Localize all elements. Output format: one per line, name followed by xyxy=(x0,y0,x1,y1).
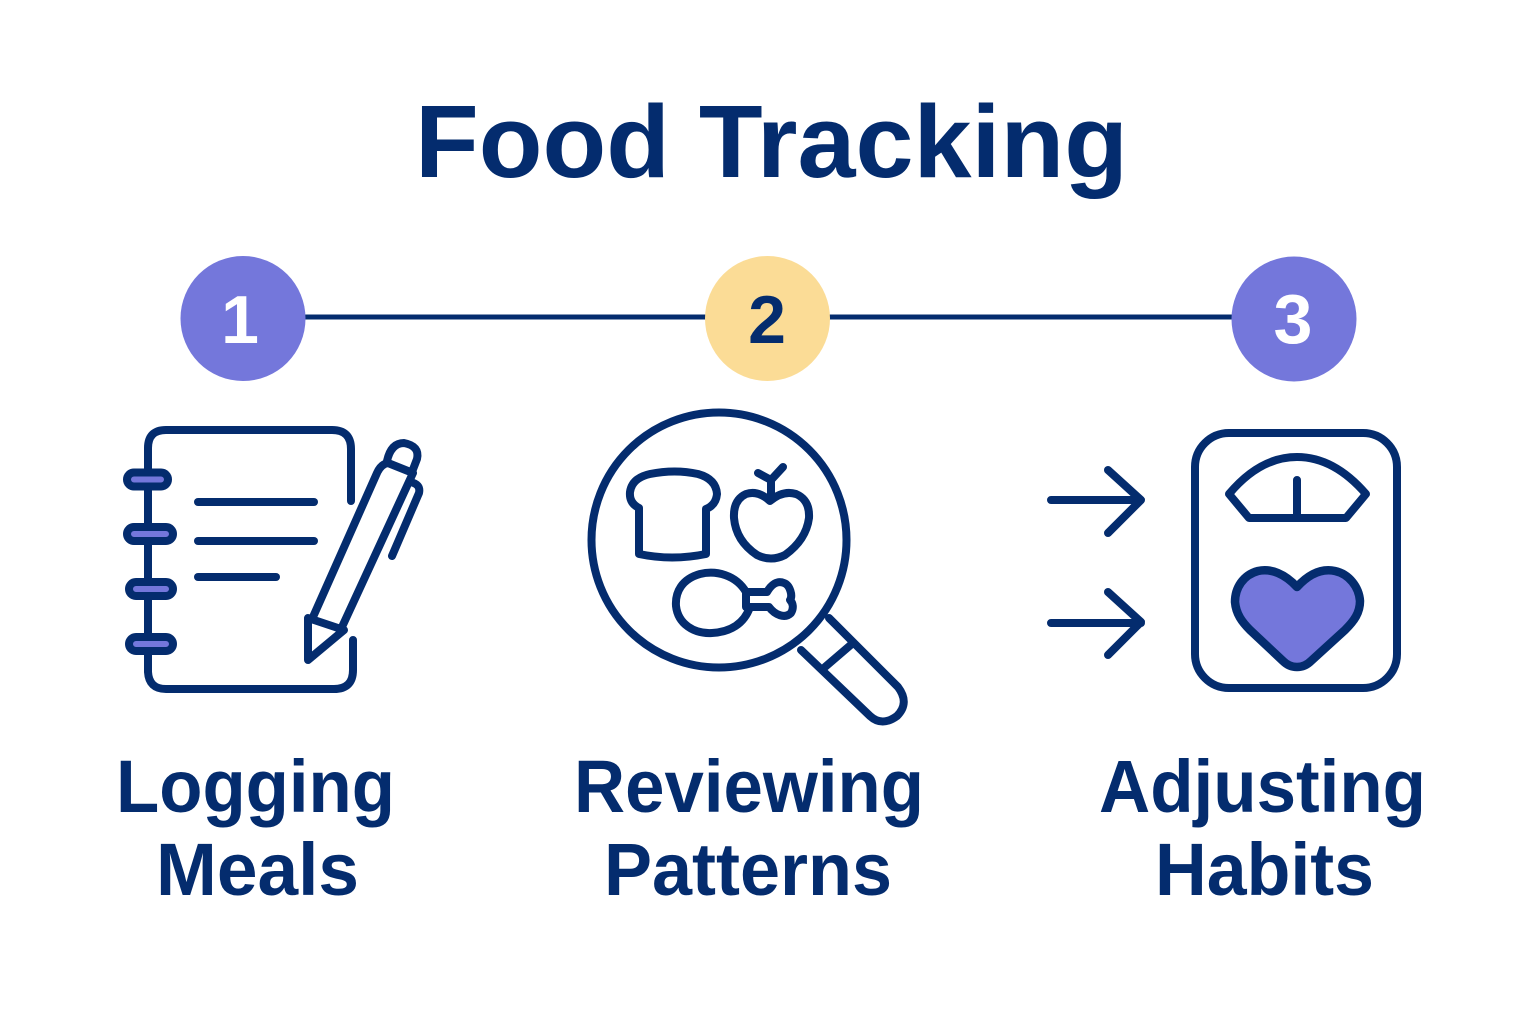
notebook spiral rings xyxy=(127,472,173,651)
heart xyxy=(1235,570,1360,667)
step 3 badge xyxy=(1232,256,1356,382)
label: Adjusting Habits xyxy=(1099,745,1426,911)
label: Reviewing Patterns: Reviewing xyxy=(574,745,924,828)
step 1 badge: 1 xyxy=(221,282,259,358)
notebook outline xyxy=(148,430,353,689)
timeline connector line xyxy=(243,314,1294,320)
label: Reviewing Patterns: Patterns xyxy=(604,828,892,911)
label: Reviewing Patterns xyxy=(574,745,924,911)
label: Adjusting Habits: Adjusting xyxy=(1099,745,1426,828)
label: Adjusting Habits: Habits xyxy=(1155,828,1374,911)
notebook text lines xyxy=(198,502,314,577)
icon: weighing scale with heart xyxy=(1195,433,1397,688)
bread xyxy=(630,472,717,558)
label: Logging Meals: Meals xyxy=(156,828,359,911)
label: Logging Meals: Logging xyxy=(116,745,395,828)
step 2 badge xyxy=(705,256,830,381)
icon: magnifying glass with food xyxy=(592,412,904,722)
step 1 badge xyxy=(180,256,306,381)
icon: arrows pointing to scale xyxy=(1051,470,1141,655)
scale body xyxy=(1195,433,1397,688)
label: Logging Meals xyxy=(116,745,395,911)
step 3 badge: 3 xyxy=(1274,280,1312,358)
chicken drumstick xyxy=(676,573,793,633)
step 2 badge: 2 xyxy=(748,282,786,358)
pen xyxy=(308,443,419,660)
magnifier lens xyxy=(592,412,846,668)
apple xyxy=(734,467,809,558)
magnifier handle xyxy=(801,618,904,722)
title: Food Tracking xyxy=(415,84,1128,199)
icon: notebook and pen xyxy=(127,430,419,689)
scale dial xyxy=(1229,457,1366,518)
